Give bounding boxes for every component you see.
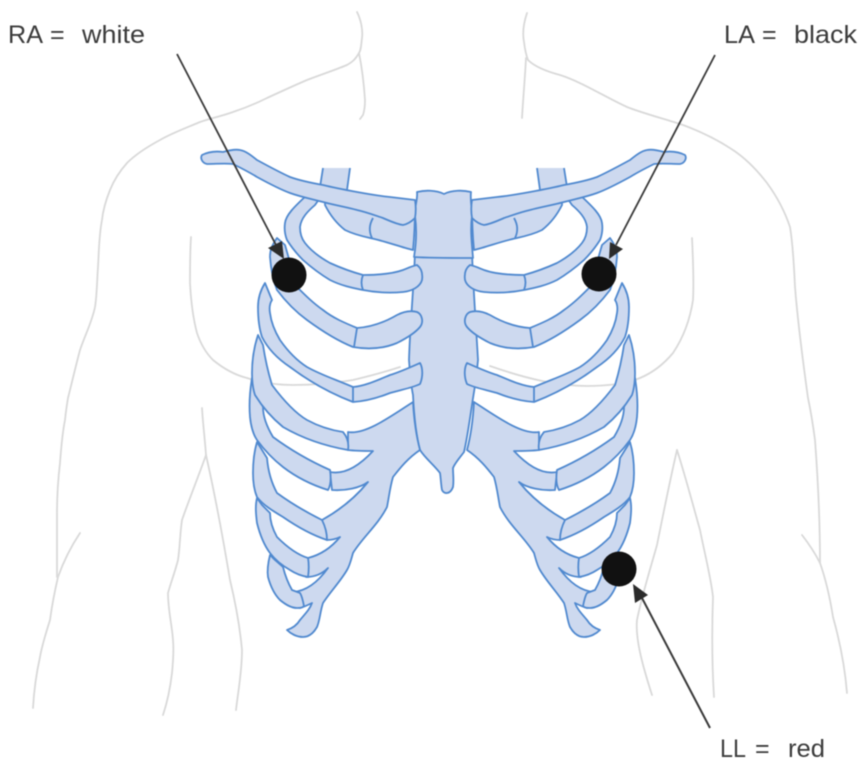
- arrow: RA: [177, 54, 284, 259]
- first rib with cartilage: [325, 198, 415, 250]
- label: LL = red: [720, 735, 825, 763]
- rib divider: [370, 218, 373, 238]
- right half of the rib cage: [465, 150, 686, 637]
- second rib with cartilage: [285, 195, 422, 293]
- label: LL = red: LL: [720, 735, 746, 763]
- third rib with cartilage: [270, 238, 422, 348]
- sternum body and xiphoid: [409, 252, 478, 493]
- label: RA = white: RA: [8, 21, 43, 49]
- label: RA = white: white: [81, 21, 145, 49]
- label: RA = white: =: [50, 21, 65, 49]
- fourth rib with cartilage: [258, 283, 422, 402]
- label: LL = red: =: [755, 735, 770, 763]
- left half of the rib cage: [201, 150, 422, 637]
- label: LA = black: [724, 21, 858, 49]
- label: RA = white: [8, 21, 145, 49]
- clavicle: [201, 150, 416, 225]
- lowest rib: [268, 555, 304, 608]
- label: LL = red: red: [788, 735, 825, 763]
- rib divider: [362, 275, 363, 290]
- label: LA = black: LA: [724, 21, 755, 49]
- costal cartilage mass: [287, 402, 420, 637]
- rib divider: [354, 328, 357, 347]
- LL electrode: [602, 552, 636, 586]
- label: LA = black: =: [762, 21, 777, 49]
- manubrium: [414, 191, 473, 258]
- rib band: [256, 498, 309, 577]
- arrow: LL: [633, 584, 710, 728]
- rib divider: [352, 387, 354, 402]
- rib band: [253, 442, 327, 540]
- rib band: [250, 378, 331, 490]
- RA electrode: [272, 258, 306, 292]
- sternum: [409, 191, 478, 493]
- arrow: LA: [609, 55, 715, 259]
- LA electrode: [582, 256, 616, 292]
- posterior first rib: [320, 168, 350, 190]
- rib band: [252, 335, 348, 450]
- label: LA = black: black: [794, 21, 858, 49]
